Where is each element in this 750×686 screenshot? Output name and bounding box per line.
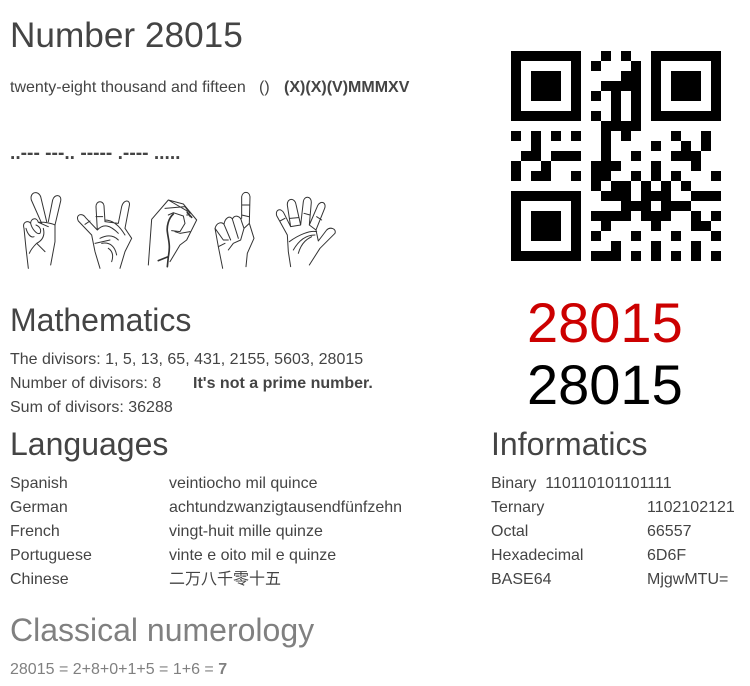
QR code (511, 51, 721, 261)
number in words and roman numeral: twenty-eight thousand and fifteen () (X)(X)(V)MMMXV (10, 79, 409, 96)
heading: Classical numerology: Classical numerology (10, 612, 314, 648)
languages table: Chinese (10, 571, 69, 588)
informatics table: 1102102121 (647, 499, 735, 516)
informatics table: Hexadecimal (491, 547, 583, 564)
languages table: vingt-huit mille quinze (169, 523, 323, 540)
languages table: Portuguese (10, 547, 92, 564)
languages table: achtundzwanzigtausendfünfzehn (169, 499, 402, 516)
number in red: 28015 (527, 291, 683, 354)
number of divisors: Number of divisors: 8 (10, 375, 161, 392)
informatics table: MjgwMTU= (647, 571, 728, 588)
number in black: 28015 (527, 353, 683, 416)
languages table: German (10, 499, 68, 516)
prime note: It's not a prime number. (193, 375, 373, 392)
title: Number 28015 (10, 16, 243, 55)
icon: hand sign 2 (24, 193, 61, 268)
sign language hands (23, 192, 336, 269)
informatics table: 66557 (647, 523, 692, 540)
heading: Informatics: Informatics (491, 426, 647, 462)
numerology sum: 28015 = 2+8+0+1+5 = 1+6 = 7 (10, 661, 227, 678)
divisors: The divisors: 1, 5, 13, 65, 431, 2155, 5603, 28015 (10, 351, 363, 368)
icon: hand sign 8 (78, 201, 132, 268)
heading: Mathematics: Mathematics (10, 302, 191, 338)
icon: hand sign 0 (148, 200, 197, 267)
icon: hand sign 5 (276, 197, 335, 267)
informatics table (491, 475, 735, 588)
sum of divisors: Sum of divisors: 36288 (10, 399, 173, 416)
informatics table: Binary 110110101101111 (491, 475, 672, 492)
informatics table: Ternary (491, 499, 544, 516)
informatics table: Octal (491, 523, 528, 540)
languages table: vinte e oito mil e quinze (169, 547, 336, 564)
heading: Languages: Languages (10, 426, 168, 462)
languages table: 二万八千零十五 (169, 571, 281, 588)
icon: hand sign 1 (215, 192, 254, 268)
languages table: veintiocho mil quince (169, 475, 318, 492)
informatics table: 6D6F (647, 547, 686, 564)
informatics table: BASE64 (491, 571, 551, 588)
languages table (10, 475, 402, 588)
languages table: French (10, 523, 60, 540)
languages table: Spanish (10, 475, 68, 492)
morse code: ..--- ---.. ----- .---- ..... (10, 143, 180, 164)
